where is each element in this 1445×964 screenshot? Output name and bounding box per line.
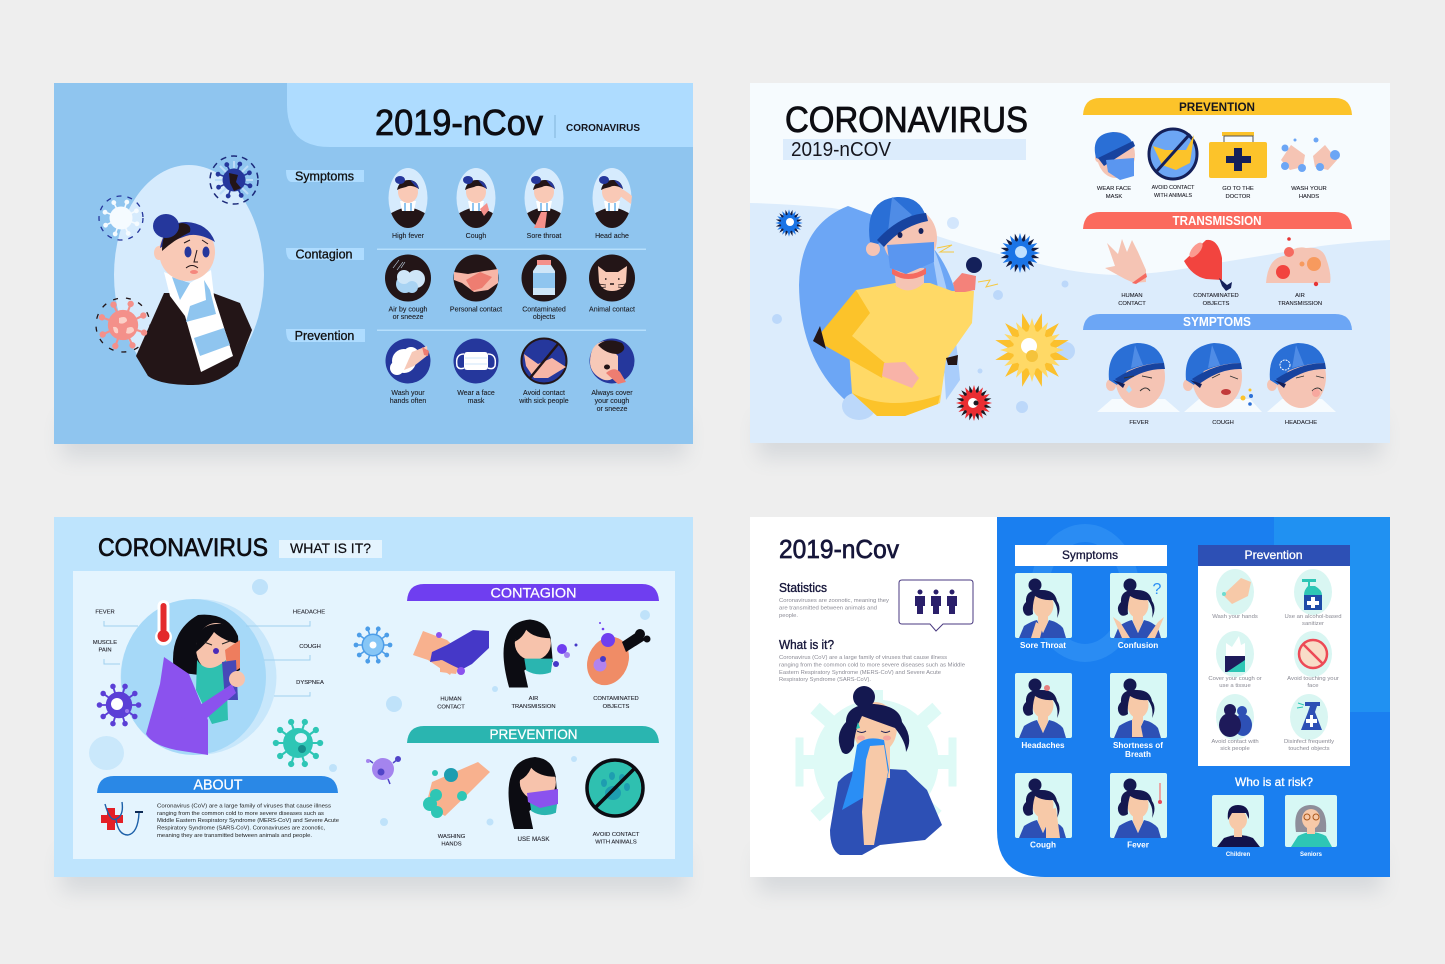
prevention: cover your cough: [590, 338, 634, 413]
prevention: wash your hands: [386, 338, 430, 405]
labels: symptom callouts: MUSCLE: [93, 640, 117, 646]
symptom: high fever: [388, 168, 428, 240]
symptom: cough face: [1183, 343, 1262, 426]
icon: go to the doctor kit: [1209, 132, 1267, 200]
symptom: fever face: FEVER: [1129, 420, 1149, 426]
symptom: headache face: HEADACHE: [1285, 420, 1317, 426]
contagion: contaminated objects: Contaminated: [522, 306, 566, 314]
title: 2019-nCov: 2019-nCov: [375, 102, 543, 143]
text: about paragraph: [157, 804, 339, 839]
contagion: contaminated objects: [522, 254, 566, 321]
ribbon: transmission: TRANSMISSION: [1172, 214, 1262, 228]
prevention: cover your cough: or sneeze: [597, 406, 627, 413]
contagion: personal contact: Personal contact: [450, 306, 502, 314]
prevention: cover your cough: Always cover: [591, 390, 633, 397]
illustration: man wearing mask: [799, 197, 998, 420]
section label: symptoms: Symptoms: [295, 170, 354, 184]
tile: cough: [1015, 773, 1072, 850]
header: prevention: Prevention: [1244, 548, 1302, 562]
tile: sore throat: Sore Throat: [1020, 641, 1066, 650]
prevention card: [1198, 545, 1350, 766]
icon: human contact hand: HUMAN: [1121, 293, 1143, 299]
virus: navy: [210, 156, 258, 204]
tile: confusion: [1110, 573, 1167, 650]
ribbon: about: [97, 776, 338, 794]
prevention: wash your hands: Wash your: [391, 390, 425, 397]
prevention: wash your hands: Wash your hands: [1212, 614, 1258, 620]
prevention: avoid contact with sick people: [518, 338, 569, 405]
icon: contaminated chicken leg: CONTAMINATED: [593, 696, 639, 702]
icon: avoid animals: AVOID CONTACT: [593, 832, 640, 838]
icon: medical cross and stethoscope: [101, 802, 143, 835]
virus: dark purple: [97, 683, 141, 727]
icon: wash your hands: HANDS: [1299, 194, 1319, 200]
virus: pink: [96, 298, 150, 352]
heading: statistics: Statistics: [779, 581, 827, 595]
icon: washing hands: WASHING: [438, 834, 466, 840]
contagion: air by cough: Air by cough: [389, 306, 428, 314]
prevention: avoid touching face: face: [1307, 683, 1319, 689]
icon: wash your hands: [1281, 138, 1340, 200]
contagion: personal contact: [450, 254, 502, 314]
tile: fever: Fever: [1127, 840, 1150, 850]
tile: children: [1212, 795, 1264, 858]
tile: headaches: [1015, 673, 1072, 750]
icon: air transmission: [1266, 237, 1330, 307]
icon: avoid contact with animals: AVOID CONTACT: [1152, 185, 1195, 191]
header: prevention: [1198, 545, 1350, 566]
section label: contagion: Contagion: [296, 248, 353, 262]
section label: prevention: Prevention: [295, 329, 354, 343]
tile: headaches: Headaches: [1021, 741, 1065, 750]
ribbon: prevention: [407, 726, 659, 743]
tag: what is it: WHAT IS IT?: [290, 540, 371, 556]
heading: who is at risk: Who is at risk?: [1235, 775, 1313, 789]
virus: yellow: [985, 303, 1079, 397]
tile: sore throat: [1015, 573, 1072, 650]
illustration: sick person with scarf: [114, 165, 264, 385]
prevention: cover your cough: [1208, 631, 1262, 689]
background wave: [750, 203, 1390, 443]
heading: what is it: What is it?: [779, 638, 834, 652]
text: statistics body: are transmitted between animals and: [779, 606, 877, 612]
icon: thermometer: [155, 600, 172, 646]
icon: air transmission: AIR: [1295, 293, 1305, 299]
icon: human contact handshake: HUMAN: [440, 696, 462, 702]
virus: lilac: [366, 756, 401, 784]
prevention: cover your cough: use a tissue: [1219, 683, 1251, 689]
icon: air transmission woman: AIR: [529, 696, 538, 702]
decorative bubbles: [772, 217, 1075, 413]
prevention: wear a face mask: [454, 338, 498, 405]
text: what is it body: Eastern Respiratory Syndrome (MERS-CoV) and Severe Acute: [779, 670, 941, 676]
prevention: wear a face mask: mask: [468, 398, 485, 405]
icon: air transmission: TRANSMISSION: [1278, 301, 1322, 307]
tile: children: Children: [1226, 852, 1250, 858]
icon: air transmission woman: TRANSMISSION: [511, 704, 556, 710]
tile: confusion: Confusion: [1118, 641, 1158, 650]
subtitle bar: 2019-nCOV: [783, 139, 1026, 161]
panel shadows: [62, 418, 1382, 892]
tile: confusion: ?: [1153, 581, 1162, 598]
icon: contaminated chicken leg: OBJECTS: [603, 704, 630, 710]
prevention: wash your hands: hands often: [390, 398, 426, 405]
prevention: avoid touching face: Avoid touching your: [1287, 676, 1339, 682]
icon: air transmission woman: [504, 620, 578, 710]
text: statistics body: Coronaviruses are zoonotic, meaning they: [779, 598, 889, 604]
icon: avoid animals: WITH ANIMALS: [595, 840, 637, 846]
prevention: avoid sick people: [1211, 694, 1259, 752]
icon: contaminated objects meat: CONTAMINATED: [1193, 293, 1239, 299]
panel: coronavirus 2019-nCOV light slide: [750, 83, 1390, 443]
prevention: disinfect objects: Disinfect frequently: [1284, 739, 1334, 745]
virus: mid blue: [996, 229, 1044, 277]
prevention: avoid sick people: Avoid contact with: [1211, 739, 1259, 745]
contagion: contaminated objects: objects: [533, 314, 556, 321]
ribbon: contagion: [407, 584, 659, 601]
labels: symptom callouts: PAIN: [98, 648, 112, 654]
header band: [287, 83, 693, 147]
contagion: animal contact: Animal contact: [589, 306, 635, 314]
icon: avoid animals: [587, 760, 643, 846]
text: about paragraph: Respiratory Syndrome (SARS-CoV). Coronaviruses are zoonotic,: [157, 826, 325, 832]
tile: shortness of breath: Breath: [1125, 750, 1151, 759]
text: what is it body: ranging from the common cold to more severe diseases such as Middle: [779, 662, 965, 668]
text: what is it body: Coronavirus (CoV) are a large family of viruses that cause illness: [779, 655, 947, 661]
text: about paragraph: ranging from the common cold to more severe diseases such as: [157, 811, 324, 817]
prevention: disinfect objects: touched objects: [1288, 746, 1330, 752]
icon: woman using mask: [509, 757, 558, 843]
illustration: coughing woman: [120, 599, 276, 755]
subtitle: coronavirus: CORONAVIRUS: [566, 122, 640, 134]
icon: human contact handshake: CONTACT: [437, 704, 465, 710]
ribbon: symptoms: [1083, 314, 1352, 330]
icon: contaminated objects meat: OBJECTS: [1203, 301, 1230, 307]
symptom: cough: [456, 168, 496, 240]
icon: avoid contact with animals: WITH ANIMALS: [1154, 193, 1192, 199]
icon: human contact hand: [1105, 239, 1147, 307]
prevention: alcohol-based sanitizer: sanitizer: [1302, 621, 1324, 627]
panel: 2019-nCov blue slide: [54, 83, 693, 444]
ribbon: prevention: [1083, 98, 1352, 115]
icon: avoid contact with animals: [1149, 129, 1197, 199]
tile: shortness of breath: [1110, 673, 1167, 759]
contagion: air by cough: [385, 254, 431, 321]
icon: wear face mask: MASK: [1106, 194, 1122, 200]
ribbon: contagion: CONTAGION: [490, 584, 576, 600]
ribbon: symptoms: SYMPTOMS: [1183, 315, 1251, 329]
header: symptoms: Symptoms: [1062, 548, 1118, 562]
prevention: cover your cough: Cover your cough or: [1208, 676, 1262, 682]
panel: coronavirus what is it slide: [54, 517, 693, 877]
labels: symptom callouts: DYSPNEA: [296, 680, 324, 686]
tile: seniors: [1285, 795, 1337, 858]
symptom: headache face: [1267, 343, 1336, 426]
text: statistics body: [779, 598, 889, 619]
ribbon: prevention: PREVENTION: [490, 726, 578, 742]
labels: symptom callouts: [93, 610, 325, 696]
icon: go to the doctor kit: DOCTOR: [1225, 194, 1251, 200]
prevention: avoid touching face: [1287, 631, 1339, 689]
icon: washing hands: [423, 762, 490, 848]
icon: human contact handshake: [413, 630, 489, 710]
icon: washing hands: HANDS: [441, 842, 462, 848]
title: coronavirus: CORONAVIRUS: [785, 99, 1028, 140]
symptom: high fever: High fever: [392, 233, 425, 240]
virus: red: [952, 381, 996, 425]
ribbon: prevention: PREVENTION: [1179, 100, 1255, 114]
tile: shortness of breath: Shortness of: [1113, 741, 1163, 750]
text: about paragraph: Middle Eastern Respiratory Syndrome (MERS-CoV) and Severe Acute: [157, 818, 339, 824]
virus: light blue: [354, 626, 392, 664]
virus: white: [99, 196, 143, 240]
icon: go to the doctor kit: GO TO THE: [1222, 186, 1254, 192]
ribbon: transmission: [1083, 212, 1352, 229]
contagion: air by cough: or sneeze: [393, 314, 423, 321]
labels: symptom callouts: HEADACHE: [293, 610, 325, 616]
ribbon: about: ABOUT: [194, 778, 243, 794]
text: what is it body: Respiratory Syndrome (SARS-CoV).: [779, 677, 871, 683]
icon: human contact hand: CONTACT: [1118, 301, 1146, 307]
icon: wear face mask: WEAR FACE: [1097, 186, 1131, 192]
prevention: avoid sick people: sick people: [1220, 746, 1250, 752]
labels: symptom callouts: COUGH: [299, 644, 321, 650]
icon: speech bubble with people: [899, 580, 973, 631]
prevention: wash your hands: [1212, 569, 1258, 620]
prevention: cover your cough: your cough: [595, 398, 629, 405]
title: coronavirus: CORONAVIRUS: [98, 534, 268, 562]
symptom: head ache: Head ache: [595, 233, 629, 240]
icon: contaminated objects meat: [1184, 240, 1239, 307]
subtitle bar: 2019-nCOV: 2019-nCOV: [791, 139, 892, 161]
tile: fever: [1110, 773, 1167, 850]
symptom: cough: Cough: [466, 233, 486, 240]
text: statistics body: people.: [779, 613, 798, 619]
prevention: disinfect objects: [1284, 694, 1334, 752]
blue background area: [997, 517, 1390, 877]
tile: cough: Cough: [1030, 840, 1056, 850]
tile: seniors: Seniors: [1300, 852, 1323, 858]
prevention: alcohol-based sanitizer: Use an alcohol-based: [1285, 614, 1341, 620]
icon: wear face mask: [1095, 132, 1135, 200]
header: symptoms: [1015, 545, 1167, 566]
virus: small blue: [772, 206, 806, 240]
text: about paragraph: meaning they are transmitted between animals and people.: [157, 833, 312, 839]
prevention: alcohol-based sanitizer: [1285, 569, 1341, 627]
illustration: woman with tissue over virus: [796, 686, 956, 855]
decorative bubbles: [89, 579, 650, 826]
labels: symptom callouts: FEVER: [95, 610, 115, 616]
icon: contaminated chicken leg: [579, 622, 650, 710]
symptom: sore throat: [524, 168, 564, 240]
symptom: cough face: COUGH: [1212, 420, 1234, 426]
symptom: fever face: [1097, 343, 1180, 426]
prevention: avoid contact with sick people: Avoid contact: [523, 390, 565, 397]
text: what is it body: [779, 655, 965, 683]
symptom: head ache: [592, 168, 632, 240]
panel: 2019-nCov statistics slide: [750, 517, 1390, 877]
title: 2019-nCov: 2019-nCov: [779, 534, 899, 564]
icon: wash your hands: WASH YOUR: [1291, 186, 1327, 192]
prevention: avoid contact with sick people: with sick people: [518, 398, 569, 405]
symptom: sore throat: Sore throat: [527, 233, 561, 240]
contagion: animal contact: [589, 254, 635, 314]
virus: teal: [273, 718, 323, 768]
icon: woman using mask: USE MASK: [518, 836, 550, 843]
text: about paragraph: Coronavirus (CoV) are a large family of viruses that cause illness: [157, 804, 331, 810]
prevention: wear a face mask: Wear a face: [457, 390, 495, 397]
